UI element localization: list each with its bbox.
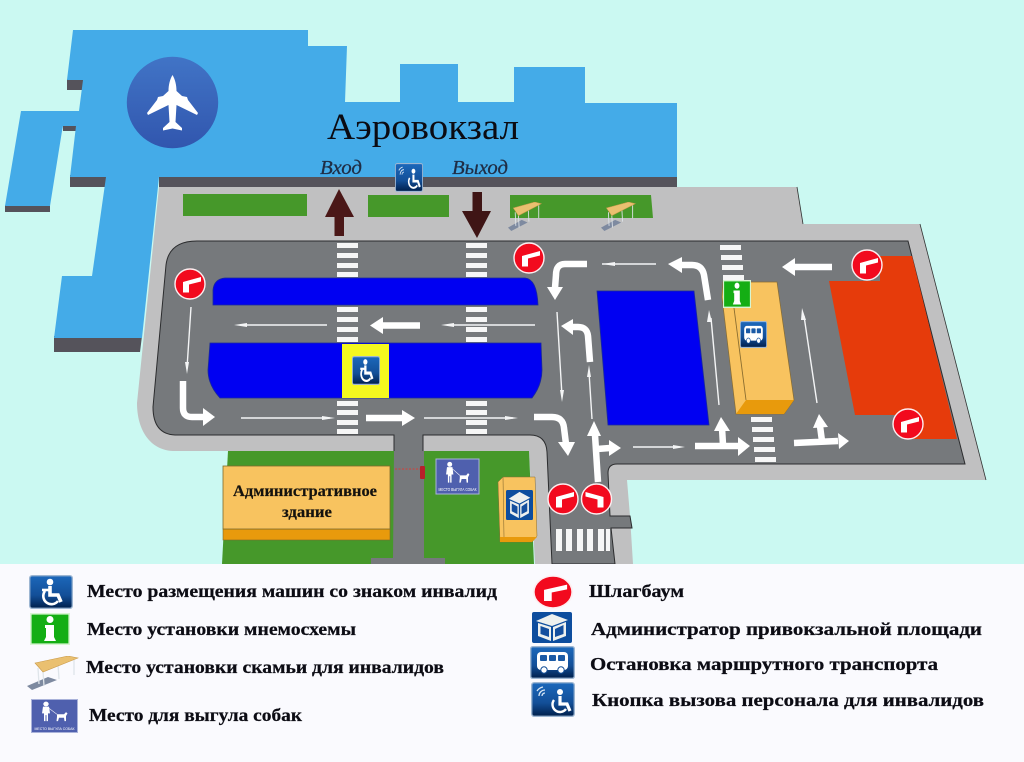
icon: staff call button [395, 164, 423, 191]
icon: information [724, 281, 750, 307]
legend: administrator [532, 612, 982, 643]
legend: bus stop: Остановка маршрутного транспорта [590, 654, 938, 674]
barrier gate arm [395, 466, 425, 479]
icon: bench 1 [508, 202, 541, 231]
icon: airplane badge [127, 57, 218, 148]
thin lane arrows [185, 262, 817, 449]
panel: terminal building [5, 30, 677, 352]
panel: blue parking right [597, 291, 709, 425]
panel: administrator kiosk [498, 477, 537, 542]
arrow: exit [462, 192, 491, 238]
legend: barrier [534, 576, 684, 608]
icon: kiosk [506, 490, 533, 520]
panel: road surface [153, 241, 965, 564]
label: entrance: Вход [320, 157, 362, 179]
panel: disabled parking bay [342, 344, 389, 398]
pavement outer edge line [797, 187, 986, 480]
legend: information board: Место установки мнемосхемы [87, 619, 356, 639]
text: building name: здание [282, 504, 332, 521]
legend: disabled parking: Место размещения машин со знаком инвалид [87, 581, 497, 601]
icon: barrier sign south right [582, 484, 612, 514]
legend: call button: Кнопка вызова персонала для инвалидов [592, 690, 984, 710]
panel: bus stop building [722, 281, 794, 414]
thick direction arrows [183, 257, 849, 482]
legend: dog walking [32, 700, 303, 732]
legend: bus stop [531, 647, 938, 678]
panel: pavement [137, 187, 986, 564]
icon: bench 2 [601, 202, 635, 231]
icon: barrier sign west [175, 269, 205, 299]
legend: administrator: Администратор привокзальной площади [591, 619, 982, 639]
sign: dog walking area: МЕСТО ВЫГУЛА СОБАК [438, 487, 477, 492]
legend: disabled parking [30, 576, 497, 608]
terminal roof [5, 30, 677, 338]
terminal dark wall edges [5, 79, 677, 352]
sign: dog walking area [436, 459, 479, 494]
icon: barrier sign north [514, 243, 544, 273]
legend: dog walking: МЕСТО ВЫГУЛА СОБАК [34, 726, 75, 731]
title: Аэровокзал [327, 107, 519, 148]
text: building name [233, 483, 377, 521]
arrow: entrance [325, 189, 354, 236]
panel: blue parking main [208, 343, 542, 398]
crosswalks [337, 243, 776, 551]
legend: bench: Место установки скамьи для инвалидов [86, 657, 444, 677]
legend: information board [31, 614, 356, 644]
legend: barrier: Шлагбаум [589, 581, 684, 601]
icon: bus [740, 322, 767, 347]
legend: call button [532, 683, 984, 716]
label: exit: Выход [452, 157, 508, 179]
icon: barrier sign south left [548, 484, 578, 514]
legend: bench [27, 656, 444, 690]
panel: red parking [829, 256, 957, 439]
road to administrative building [371, 451, 445, 564]
panel: blue parking upper [213, 278, 538, 305]
panel: green lawns by terminal [183, 194, 653, 218]
legend: dog walking: Место для выгула собак [89, 705, 303, 725]
icon: wheelchair [352, 357, 380, 384]
panel: lower lawn [222, 451, 534, 564]
text: building name: Административное [233, 483, 377, 500]
icon: barrier sign southeast [893, 409, 923, 439]
icon: barrier sign northeast [852, 250, 882, 280]
panel: legend [0, 564, 1024, 762]
panel: administrative building [223, 466, 390, 540]
